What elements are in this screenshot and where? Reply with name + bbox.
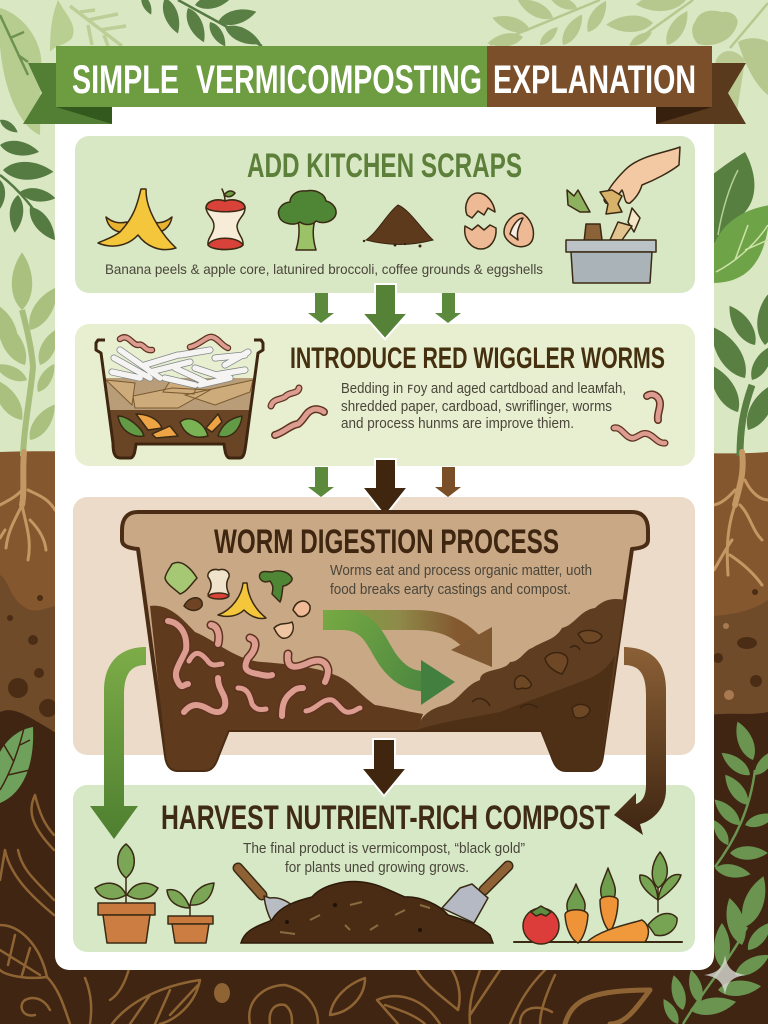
arrow: brown flow to compost <box>323 620 492 667</box>
body text: digestion: Worms eat and process organic matter, uoth <box>330 562 592 579</box>
body text: bedding: shredded paper, cardboad, swriflinger, worms <box>341 398 612 415</box>
icon: broccoli <box>278 191 336 250</box>
heading: add kitchen scraps: ADD KITCHEN SCRAPS <box>247 147 522 185</box>
shredded paper <box>112 350 248 385</box>
arrows: worms to digestion <box>308 459 461 516</box>
background: soil pebbles <box>7 589 762 717</box>
icon: right trowel <box>442 866 508 923</box>
icon: hand and bin <box>566 147 680 283</box>
background: bottom-right green leaves <box>659 719 768 1024</box>
food scraps in bin <box>165 562 310 638</box>
white card <box>55 100 714 970</box>
body text: bedding: Bedding in ꜰoy and aged cartdboad and leaмfah, <box>341 380 626 397</box>
panel: add kitchen scraps <box>75 136 695 293</box>
body text: digestion <box>330 562 592 598</box>
leaves <box>118 414 242 438</box>
panel: worm digestion process background <box>73 497 695 755</box>
heading: harvest nutrient-rich compost: HARVEST NUTRIENT-RICH COMPOST <box>161 799 610 837</box>
banner bands <box>56 46 712 107</box>
illustration: bedding bin <box>96 340 263 458</box>
caption: kitchen scraps: Banana peels & apple core, latunired broccoli, coffee grounds & eggshells <box>105 261 543 277</box>
title banner <box>23 46 746 124</box>
icon: small potted seedling <box>167 883 214 943</box>
soil: bedding pile <box>150 606 423 770</box>
arrow: green side loop to plants <box>90 647 146 839</box>
background: left green leaf <box>0 727 33 803</box>
compost lumps <box>472 630 602 718</box>
icon: left trowel <box>238 868 302 922</box>
bin: worm digestion tub <box>122 512 648 770</box>
panel: harvest nutrient-rich compost <box>73 785 695 952</box>
arrow: compost returned right side <box>614 647 666 835</box>
sparkle mark <box>704 955 746 995</box>
icon: compost mound <box>241 882 493 943</box>
icon: coffee grounds <box>363 205 433 248</box>
body text: black gold: for plants uned growing grows. <box>285 859 469 876</box>
icon: large potted seedling <box>95 844 158 943</box>
body text: bedding: and process hunms are improve thiem. <box>341 415 574 432</box>
background: top-right foliage <box>486 0 768 125</box>
heading: worm digestion process: WORM DIGESTION PROCESS <box>214 523 559 561</box>
background: right large leaves <box>703 152 768 456</box>
banner title text: SIMPLE <box>72 58 179 102</box>
background: soil decorative dot <box>214 983 230 1003</box>
background: left dark branch <box>0 117 61 244</box>
icon: eggshells <box>465 193 533 249</box>
icon: banana peel <box>98 189 176 250</box>
arrow: green flow to compost <box>323 620 455 705</box>
arrow: digestion to harvest centre <box>361 739 407 796</box>
body text: digestion: food breaks earty castings and compost. <box>330 581 571 598</box>
background: left light plant <box>0 252 64 456</box>
ribbon tails <box>23 63 746 124</box>
background: roots in soil <box>0 452 768 585</box>
background: carved leaf patterns in soil <box>0 795 650 1024</box>
worms: panel two <box>120 337 665 443</box>
icon: vegetables <box>514 852 682 944</box>
icon: apple core <box>206 189 245 250</box>
background: top-left foliage <box>0 0 264 135</box>
soil: finished compost pile <box>417 599 625 770</box>
bin outline <box>96 340 263 458</box>
body text: bedding <box>341 380 626 432</box>
worms in bedding <box>168 621 360 716</box>
banner title text: VERMICOMPOSTING <box>196 58 482 102</box>
arrows: scraps to worms <box>308 284 461 339</box>
bedding layers <box>105 378 254 412</box>
body text: black gold: The final product is vermicompost, “black gold” <box>243 840 525 857</box>
panel: introduce red wiggler worms <box>75 324 695 466</box>
body text: black gold <box>243 840 525 876</box>
